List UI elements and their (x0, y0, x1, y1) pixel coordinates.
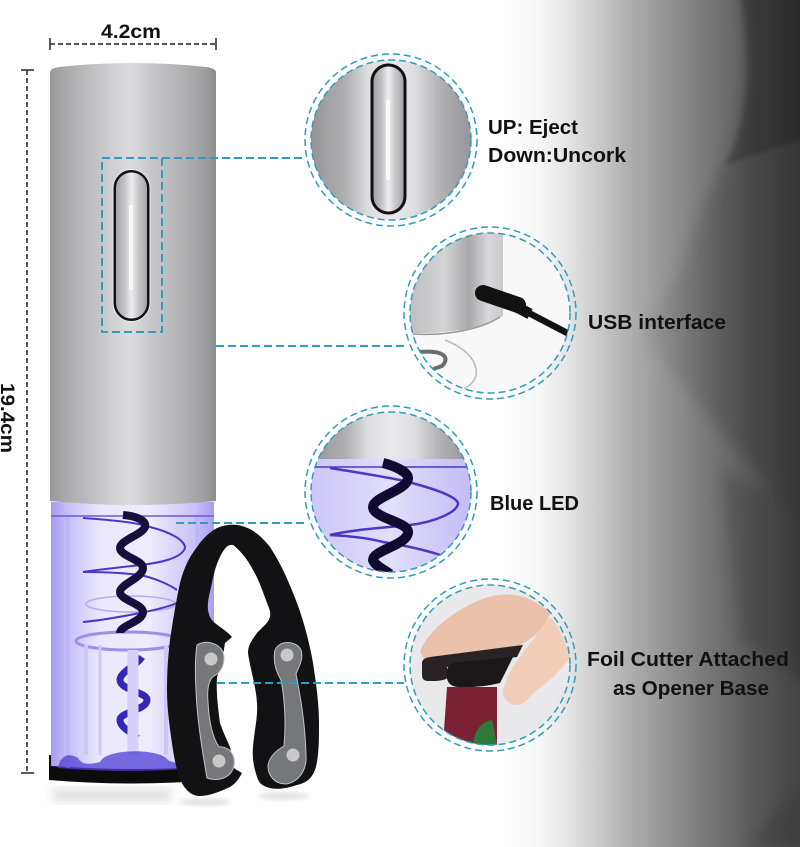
metal plate right (268, 642, 306, 784)
background gradient (538, 0, 800, 847)
switch button (113, 170, 150, 322)
switch highlight box (102, 158, 162, 332)
reflection (52, 788, 172, 802)
wine opener device (49, 63, 216, 802)
circle: blue LED detail (305, 406, 477, 578)
circle: usb interface detail (404, 227, 576, 399)
glass body (51, 502, 214, 769)
circle: foil cutter detail (404, 579, 576, 751)
circle: switch detail (305, 54, 477, 226)
label: switch: Down:Uncork (488, 145, 627, 167)
black base (49, 755, 215, 784)
foil cutter (167, 525, 319, 806)
width label: 4.2cm (101, 22, 161, 43)
silver housing (50, 63, 216, 505)
label: switch: UP: Eject (488, 117, 578, 139)
label: foil cutter (587, 649, 789, 700)
label: blue led: Blue LED (490, 493, 579, 515)
label: usb: USB interface (588, 312, 726, 334)
label: switch (488, 117, 627, 167)
connector lines (102, 158, 404, 683)
label: foil cutter: as Opener Base (613, 678, 769, 700)
metal plate left (195, 642, 234, 780)
label: foil cutter: Foil Cutter Attached (587, 649, 789, 671)
